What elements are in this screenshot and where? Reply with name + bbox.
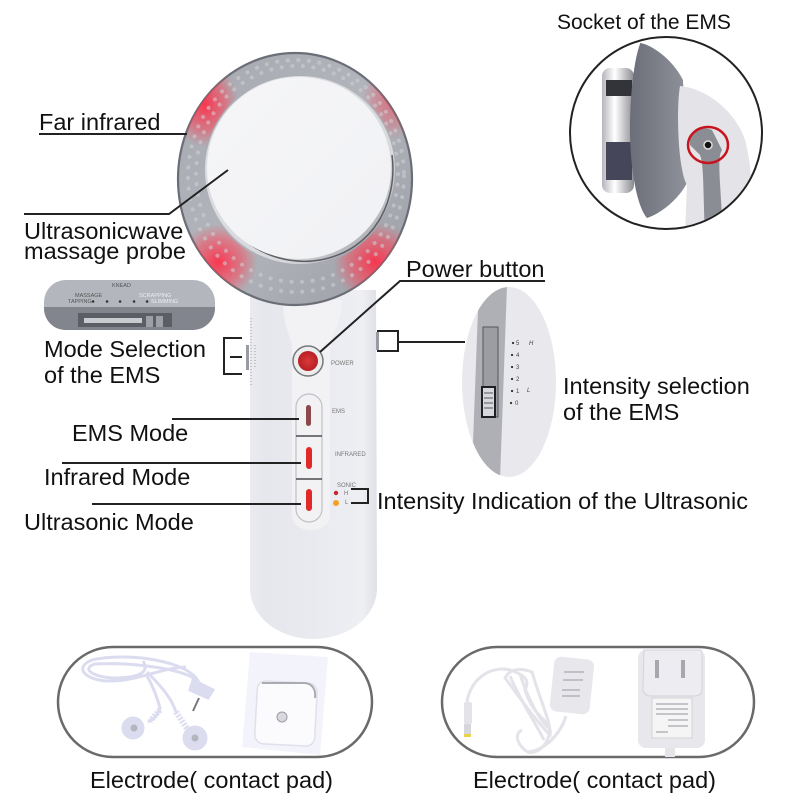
panel: mode selection close-up: SLIMMING	[151, 299, 178, 305]
panel: intensity selection oval: 5	[516, 341, 520, 347]
label: infrared mode: Infrared Mode	[44, 464, 190, 490]
panel: mode selection close-up: KNEAD	[112, 283, 131, 289]
caption: electrode right: Electrode( contact pad)	[473, 767, 716, 793]
panel: socket close-up circle	[570, 37, 762, 235]
label: far infrared: Far infrared	[39, 109, 160, 135]
massage head ring	[171, 53, 422, 305]
leader lines	[24, 134, 545, 504]
adapter with cable	[464, 656, 595, 753]
panel: intensity selection oval: H	[529, 341, 534, 347]
panel: intensity selection oval: 2	[516, 377, 520, 383]
mode button panel: EMS	[332, 409, 345, 415]
label: mode selection	[44, 336, 206, 388]
label: mode selection: of the EMS	[44, 362, 160, 388]
panel: intensity selection oval: 4	[516, 353, 520, 359]
label: power button: Power button	[406, 256, 544, 282]
panel: intensity selection oval: 0	[515, 401, 519, 407]
label: EMS mode: EMS Mode	[72, 420, 188, 446]
mode button panel: INFRARED	[335, 452, 366, 458]
power button	[293, 346, 354, 376]
panel: intensity selection oval: 1	[516, 389, 520, 395]
wall plug	[638, 650, 705, 757]
label: intensity selection: of the EMS	[563, 399, 679, 425]
electrode cable	[83, 657, 213, 749]
mode button panel	[296, 394, 366, 522]
caption: electrode left: Electrode( contact pad)	[90, 767, 333, 793]
ultrasonic probe mirror	[205, 76, 395, 264]
label: socket of the EMS: Socket of the EMS	[557, 11, 731, 34]
label: intensity selection: Intensity selection	[563, 373, 750, 399]
panel: mode selection close-up: TAPPING	[68, 299, 92, 305]
label: mode selection: Mode Selection	[44, 336, 206, 362]
label: intensity selection	[563, 373, 750, 425]
label: ultrasonic probe	[24, 218, 186, 264]
label: ultrasonic intensity indication: Intensity Indication of the Ultrasonic	[377, 488, 748, 514]
electrode pad in bag	[242, 652, 328, 755]
power button: POWER	[331, 361, 354, 367]
mode button panel: SONIC	[337, 483, 357, 489]
label: ultrasonic mode: Ultrasonic Mode	[24, 509, 194, 535]
mode button panel: H	[344, 491, 348, 497]
panel: intensity selection oval: L	[527, 388, 530, 394]
panel: intensity selection oval: 3	[516, 365, 520, 371]
accessory pill: electrode	[58, 647, 372, 757]
panel: mode selection close-up	[44, 280, 215, 330]
panel: mode selection close-up: SCRAPPING	[139, 293, 171, 299]
label: ultrasonic probe: massage probe	[24, 238, 186, 264]
mode button panel: L	[345, 500, 349, 506]
panel: intensity selection oval	[462, 285, 556, 480]
panel: mode selection close-up: MASSAGE	[75, 293, 103, 299]
accessory pill: power adapter	[442, 647, 754, 757]
device body	[246, 290, 379, 639]
label: ultrasonic probe: Ultrasonicwave	[24, 218, 183, 244]
